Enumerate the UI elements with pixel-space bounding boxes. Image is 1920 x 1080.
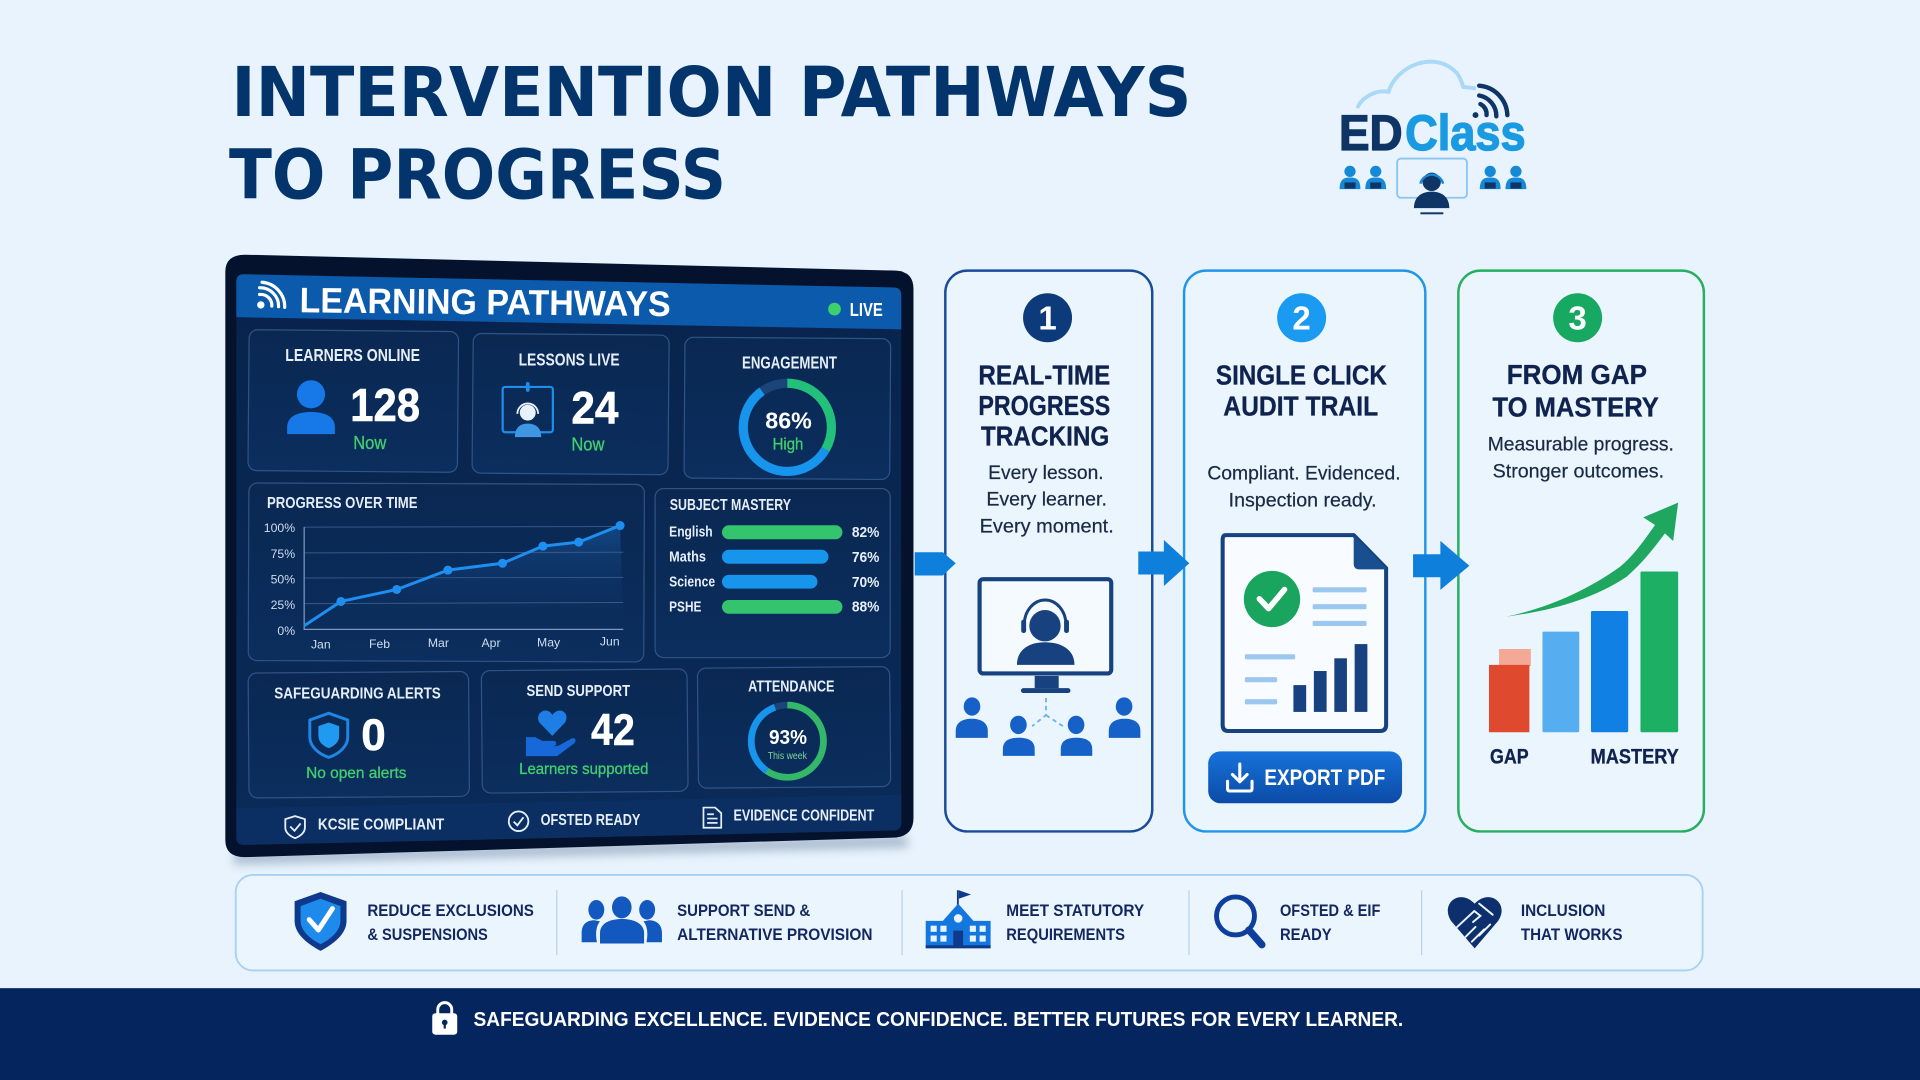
- bar: PSHE: 88%: [852, 600, 879, 616]
- benefit: ofsted and eif ready: READY: [1280, 925, 1332, 944]
- icon: shield check: [295, 892, 347, 951]
- heading: AUDIT TRAIL: [1223, 390, 1378, 421]
- description: Every lesson.: [988, 462, 1104, 484]
- heading: [1492, 359, 1659, 422]
- ring chart: attendance 93%: [751, 705, 823, 777]
- bar: Science: Science: [669, 575, 715, 591]
- line chart: progress: 0%: [277, 624, 295, 638]
- panel: benefits strip: [236, 875, 1703, 970]
- badge: 2: 2: [1292, 300, 1311, 337]
- bar: English: 82%: [852, 525, 879, 541]
- ring chart: engagement 86%: 86%: [765, 408, 812, 434]
- icon: person: [287, 380, 335, 434]
- benefit: statutory requirements: REQUIREMENTS: [1006, 925, 1125, 944]
- description: Every moment.: [980, 515, 1114, 537]
- heading: TO MASTERY: [1492, 391, 1659, 422]
- description: [980, 462, 1114, 537]
- bar chart: gap to mastery: [1489, 503, 1679, 769]
- heading: [978, 359, 1110, 452]
- footer banner: SAFEGUARDING EXCELLENCE. EVIDENCE CONFIDENCE. BETTER FUTURES FOR EVERY LEARNER.: [474, 1009, 1403, 1031]
- badge: 1: [1023, 293, 1072, 342]
- card: attendance: [697, 667, 891, 788]
- card: send support: SEND SUPPORT: [527, 683, 630, 700]
- bar: Science: [669, 575, 879, 591]
- line chart: progress: 50%: [271, 572, 295, 586]
- card: subject mastery: [655, 489, 890, 658]
- icon: document: [703, 808, 721, 828]
- card: lessons live: [472, 333, 669, 475]
- card: safeguarding alerts: SAFEGUARDING ALERTS: [274, 686, 441, 703]
- icon: live lesson screen: [503, 382, 553, 437]
- bar chart: gap to mastery: GAP: [1490, 746, 1529, 769]
- icon: heart with handshake: [1448, 897, 1502, 948]
- bar: PSHE: PSHE: [669, 600, 702, 616]
- ring chart: attendance 93%: 93%: [769, 727, 807, 749]
- title: INTERVENTION PATHWAYS: [231, 53, 1191, 133]
- dashboard compliance footer: EVIDENCE CONFIDENT: [733, 807, 875, 824]
- benefit: ofsted and eif ready: OFSTED & EIF: [1280, 901, 1380, 920]
- icon: signal: [257, 282, 285, 309]
- benefit: support send: SUPPORT SEND &: [677, 901, 810, 920]
- heading: REAL-TIME: [978, 359, 1110, 390]
- line chart: progress: 75%: [271, 547, 295, 561]
- card: lessons live: 24: [571, 383, 618, 434]
- icon: school building: [926, 890, 991, 948]
- badge: 1: 1: [1038, 300, 1057, 337]
- description: Every learner.: [986, 489, 1107, 511]
- dashboard header: LEARNING PATHWAYS: [299, 280, 671, 324]
- logo: EDClass: ED: [1339, 105, 1403, 161]
- line chart: progress: Jun: [600, 634, 620, 648]
- icon: shield: [310, 713, 348, 757]
- card: send support: Learners supported: [519, 761, 648, 778]
- arrow: growth: [1506, 503, 1678, 617]
- card: lessons live: LESSONS LIVE: [519, 350, 620, 370]
- bar: Maths: Maths: [669, 549, 706, 565]
- icon: heart in hand: [526, 710, 576, 756]
- line chart: progress: Mar: [428, 636, 449, 650]
- heading: PROGRESS: [978, 390, 1110, 421]
- card: learners online: Now: [353, 432, 387, 453]
- logo: EDClass: [1339, 62, 1526, 214]
- arrow: dashboard to step 1: [915, 552, 956, 576]
- card: safeguarding alerts: 0: [361, 711, 386, 760]
- icon: padlock: [432, 1003, 457, 1035]
- benefit: reduce exclusions: REDUCE EXCLUSIONS: [367, 901, 534, 920]
- button: export pdf: EXPORT PDF: [1264, 765, 1385, 790]
- bar: Maths: [669, 549, 879, 566]
- card: send support: 42: [591, 706, 635, 755]
- description: Inspection ready.: [1229, 489, 1377, 511]
- arrow: step 1 to step 2: [1138, 540, 1189, 586]
- card: send support: [481, 669, 688, 793]
- card: learners online: [248, 330, 459, 472]
- bar: Maths: 76%: [852, 550, 879, 566]
- benefit: statutory requirements: [926, 890, 1144, 948]
- card: progress over time: PROGRESS OVER TIME: [267, 495, 418, 512]
- benefit: support send: [582, 896, 872, 944]
- card: engagement: ENGAGEMENT: [742, 353, 837, 373]
- icon: check circle: [509, 811, 528, 831]
- line chart: progress: Feb: [369, 637, 390, 651]
- bar: PSHE: [669, 600, 879, 616]
- line chart: progress: Jan: [311, 637, 331, 651]
- line chart: progress: Apr: [481, 636, 501, 650]
- description: Measurable progress.: [1488, 434, 1674, 456]
- card: safeguarding alerts: No open alerts: [306, 765, 407, 782]
- description: [1488, 434, 1674, 483]
- card: safeguarding alerts: [248, 671, 469, 798]
- dashboard compliance footer: KCSIE COMPLIANT: [318, 817, 445, 834]
- footer banner: [0, 988, 1920, 1080]
- title: TO PROGRESS: [229, 135, 726, 215]
- line chart: progress: [264, 521, 625, 651]
- icon: learners group: [956, 697, 1140, 756]
- benefit: inclusion that works: [1448, 897, 1622, 948]
- badge: 3: [1553, 293, 1602, 342]
- description: Stronger outcomes.: [1493, 461, 1664, 483]
- dashboard compliance footer: OFSTED READY: [541, 812, 640, 829]
- live status: [828, 299, 883, 320]
- heading: [1216, 360, 1387, 421]
- icon: audit document: [1223, 535, 1387, 731]
- live status: LIVE: [850, 299, 883, 320]
- icon: monitor with tutor: [980, 579, 1111, 693]
- line chart: progress: 100%: [264, 521, 295, 535]
- benefit: inclusion that works: THAT WORKS: [1521, 925, 1622, 944]
- benefit: ofsted and eif ready: [1217, 897, 1380, 945]
- ring chart: engagement 86%: [743, 383, 831, 471]
- benefit: reduce exclusions: & SUSPENSIONS: [367, 925, 488, 944]
- benefit: statutory requirements: MEET STATUTORY: [1006, 901, 1144, 920]
- benefit: support send: ALTERNATIVE PROVISION: [677, 925, 872, 944]
- panel: step 2 single click audit trail: [1184, 271, 1425, 831]
- ring chart: engagement 86%: High: [773, 434, 803, 453]
- line chart: progress: May: [537, 636, 561, 650]
- button: export pdf: [1208, 751, 1402, 803]
- dashboard compliance footer: [236, 795, 901, 845]
- arrow: step 2 to step 3: [1413, 541, 1469, 590]
- bar chart: gap to mastery: MASTERY: [1591, 746, 1679, 769]
- card: subject mastery: SUBJECT MASTERY: [670, 497, 791, 514]
- card: engagement: [684, 337, 891, 479]
- card: learners online: LEARNERS ONLINE: [285, 345, 420, 365]
- bar: Science: 70%: [852, 575, 879, 591]
- panel: learning pathways dashboard tablet: [225, 255, 913, 864]
- card: attendance: ATTENDANCE: [748, 678, 834, 695]
- heading: TRACKING: [981, 421, 1109, 452]
- ring chart: attendance 93%: This week: [768, 751, 807, 762]
- card: learners online: 128: [350, 379, 420, 431]
- benefit: inclusion that works: INCLUSION: [1521, 901, 1605, 920]
- icon: shield check: [285, 816, 305, 838]
- description: Compliant. Evidenced.: [1207, 463, 1401, 485]
- bar: English: [669, 524, 879, 541]
- heading: FROM GAP: [1507, 359, 1647, 390]
- logo: EDClass: Class: [1405, 105, 1526, 161]
- line chart: progress: 25%: [271, 598, 295, 612]
- benefit: reduce exclusions: [295, 892, 534, 951]
- panel: step 1 real-time progress tracking: [945, 271, 1152, 831]
- dashboard header: [236, 274, 901, 329]
- bar: English: English: [669, 524, 713, 540]
- badge: 3: 3: [1568, 300, 1587, 337]
- card: progress over time: [248, 483, 644, 662]
- panel: step 3 from gap to mastery: [1458, 271, 1704, 831]
- icon: download: [1228, 764, 1252, 791]
- heading: SINGLE CLICK: [1216, 360, 1387, 391]
- card: lessons live: Now: [571, 434, 605, 455]
- title: [229, 53, 1191, 215]
- icon: people: [582, 896, 662, 943]
- description: [1207, 463, 1401, 511]
- icon: magnifier: [1217, 897, 1262, 945]
- badge: 2: [1277, 293, 1326, 342]
